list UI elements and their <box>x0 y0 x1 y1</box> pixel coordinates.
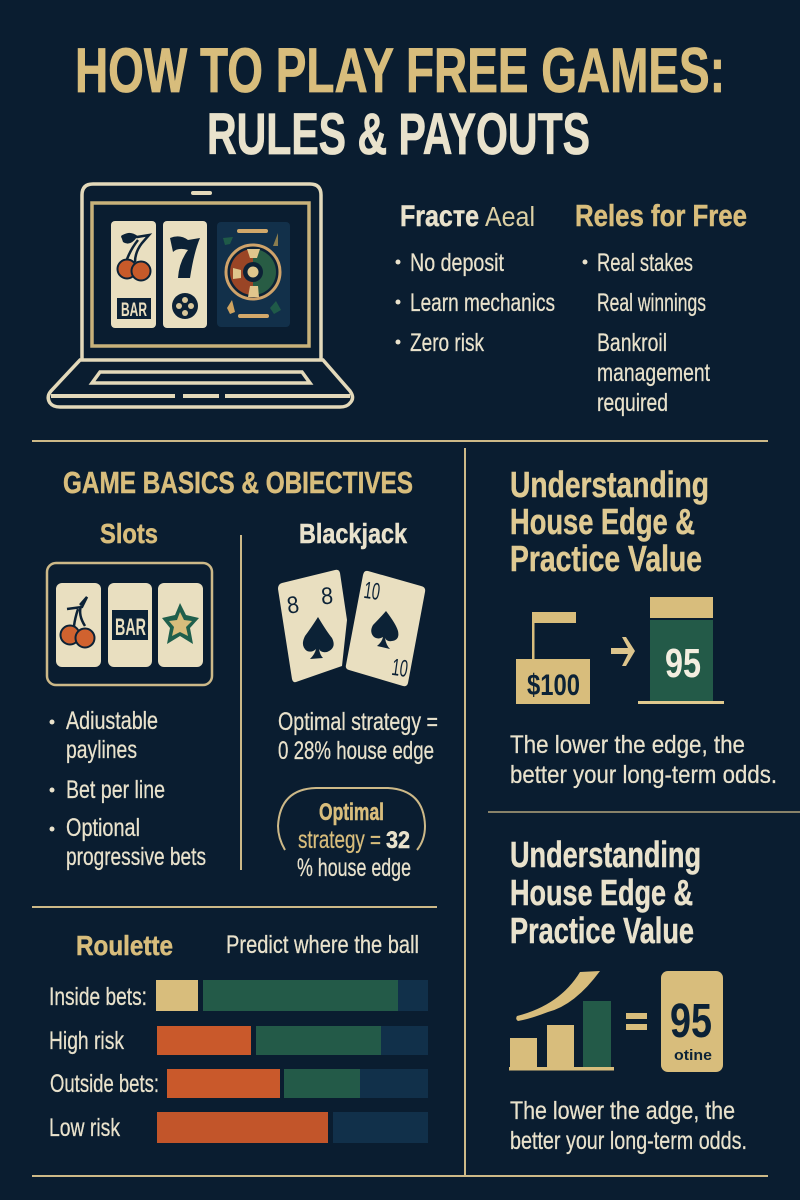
icon: 95 value card <box>661 971 723 1072</box>
slots bullet list: Adiustable <box>66 707 158 735</box>
text block: practice column: Aeal <box>485 201 535 232</box>
icon: 95 value card: 95 <box>670 995 712 1048</box>
text block: practice column: Fracтe <box>400 200 479 233</box>
slot reel one <box>111 221 156 328</box>
panel: house edge top <box>510 464 777 789</box>
icon: slot machine reels <box>47 563 212 685</box>
blackjack strategy text <box>278 708 438 765</box>
icon: slot machine reels: BAR <box>115 614 146 641</box>
text block: real money column: Bankroil <box>597 329 667 357</box>
icon: playing cards: 8 <box>320 583 334 610</box>
row: inside bets <box>49 980 428 1011</box>
heading <box>510 834 701 951</box>
heading: game basics: GAME BASICS & OBIECTIVES <box>63 465 413 500</box>
row: low risk: Low risk <box>49 1114 120 1142</box>
title: RULES & PAYOUTS <box>207 102 590 167</box>
text block: real money column: required <box>597 389 668 417</box>
heading: House Edge & <box>510 501 695 542</box>
caption: The lower the edge, the <box>510 731 745 759</box>
icon: playing cards: 10 <box>390 654 410 683</box>
slots bullet list: paylines <box>66 736 137 764</box>
panel: roulette <box>49 930 428 1143</box>
icon: rising bar chart <box>509 971 614 1070</box>
blackjack strategy text: 0 28% house edge <box>278 737 434 765</box>
row: low risk <box>49 1112 428 1143</box>
icon: 95 return column <box>638 597 724 704</box>
panel: slots <box>47 518 212 871</box>
heading <box>510 464 709 579</box>
icon: laptop with slot reels and roulette wheel <box>48 184 352 407</box>
icon: flag stake box <box>516 612 590 704</box>
icon: 95 value card: otine <box>674 1047 712 1064</box>
icon: playing cards <box>278 570 425 686</box>
row: inside bets: Inside bets: <box>49 983 147 1011</box>
laptop outline <box>48 184 352 407</box>
caption <box>510 1097 747 1155</box>
callout: optimal strategy: Optimal <box>319 799 384 826</box>
callout: optimal strategy: 32 <box>386 827 410 854</box>
slots bullet list: Bet per line <box>66 776 165 804</box>
text block: real money column: management <box>597 359 710 387</box>
icon: playing cards: 8 <box>285 591 301 620</box>
caption: The lower the adge, the <box>510 1097 735 1125</box>
row: outside bets: Outside bets: <box>50 1070 159 1098</box>
text block: real money column: Reles for Free <box>575 198 747 233</box>
caption <box>510 731 777 789</box>
text block: practice column: No deposit <box>410 249 504 277</box>
icon: playing cards: 10 <box>362 577 382 606</box>
text block: real money column <box>575 198 747 417</box>
icon: 95 return column: 95 <box>665 640 701 686</box>
row: high risk <box>49 1026 428 1055</box>
text block: practice column: Zero risk <box>410 329 484 357</box>
blackjack heading: Blackjack <box>299 518 407 549</box>
panel: house edge bottom <box>509 834 747 1155</box>
text block: practice column: Learn mechanics <box>410 289 555 317</box>
heading: Practice Value <box>510 538 702 579</box>
callout: optimal strategy <box>278 788 425 882</box>
slots bullet list <box>50 707 206 871</box>
heading: Practice Value <box>510 910 694 951</box>
equals sign <box>626 1013 647 1030</box>
slot reel one: BAR <box>121 300 147 321</box>
slots bullet list: progressive bets <box>66 843 206 871</box>
slots bullet list: Optional <box>66 814 140 842</box>
text block: practice column <box>396 200 555 357</box>
roulette heading: Roulette <box>76 930 173 961</box>
text block: real money column: Real stakes <box>597 249 693 277</box>
blackjack strategy text: Optimal strategy = <box>278 708 438 736</box>
callout: optimal strategy: strategy = <box>298 826 381 854</box>
slots heading: Slots <box>100 518 158 549</box>
icon: flag stake box: $100 <box>527 669 580 702</box>
heading: Understanding <box>510 834 701 875</box>
panel: blackjack <box>278 518 438 882</box>
callout: optimal strategy: % house edge <box>297 854 411 882</box>
slot reel two <box>163 221 207 328</box>
roulette description: Predict where the ball <box>226 931 419 959</box>
heading: Understanding <box>510 464 709 505</box>
roulette panel <box>217 222 290 327</box>
text block: real money column: Real winnings <box>597 289 706 317</box>
bar chart: bet risk <box>49 980 428 1143</box>
title <box>75 36 725 167</box>
heading: House Edge & <box>510 872 693 913</box>
row: high risk: High risk <box>49 1027 124 1055</box>
arrow <box>611 637 635 666</box>
row: outside bets <box>50 1069 428 1098</box>
